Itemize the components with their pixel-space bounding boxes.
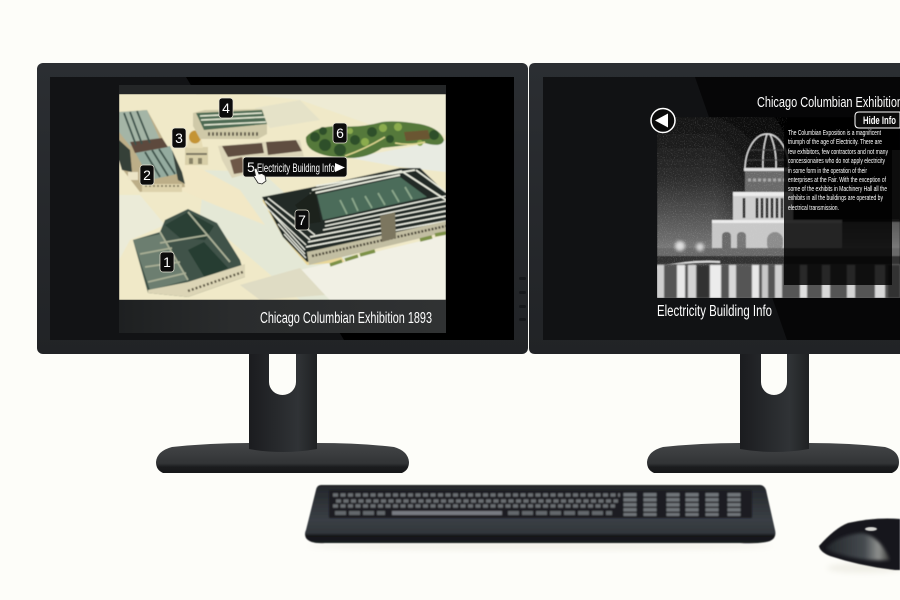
marker 4 — [219, 98, 233, 118]
slide caption: Electricity Building Info — [657, 303, 772, 320]
key area — [329, 490, 752, 518]
right monitor — [529, 63, 900, 354]
bezel — [529, 63, 900, 354]
bezel — [37, 63, 528, 354]
marker 6: 6 — [336, 125, 344, 141]
shoreline — [657, 248, 900, 258]
dome — [744, 134, 790, 192]
building 1 — [133, 209, 245, 297]
marker 5 tooltip: Electricity Building Info: Electricity Building Info — [257, 161, 335, 175]
map top bar — [119, 85, 446, 94]
marker 5 tooltip: Electricity Building Info: 5 — [247, 159, 255, 175]
illustrated fairground map — [119, 94, 446, 300]
screen reflection — [50, 77, 344, 340]
icon: back arrow button — [651, 108, 675, 132]
colonnade — [733, 192, 793, 222]
info text panel — [784, 123, 892, 285]
building 4 — [193, 109, 267, 139]
right monitor stand — [647, 354, 899, 473]
marker 2 — [140, 165, 154, 185]
screen — [543, 77, 900, 340]
monitor buttons — [519, 277, 526, 321]
map caption: Chicago Columbian Exhibition 1893 — [260, 310, 432, 327]
water reflections — [657, 264, 900, 298]
marker 3: 3 — [175, 130, 183, 146]
marker 7: 7 — [298, 212, 306, 228]
marker 1: 1 — [163, 254, 171, 270]
building 5 — [218, 140, 304, 178]
building 6 island — [306, 121, 444, 158]
building 2 — [119, 110, 185, 192]
keyboard — [305, 485, 775, 550]
building 7 machinery hall — [262, 168, 446, 265]
screen — [50, 77, 514, 340]
left monitor — [37, 63, 528, 354]
building 3 — [185, 130, 208, 165]
mouse — [819, 518, 900, 573]
map caption bar — [119, 300, 446, 333]
marker 5 tooltip: Electricity Building Info — [243, 157, 347, 177]
night photo of the electricity building — [657, 117, 900, 298]
marker 4: 4 — [222, 100, 230, 116]
marker 6 — [333, 123, 347, 143]
left monitor stand — [156, 354, 409, 473]
marker 3 — [172, 128, 186, 148]
marker 2: 2 — [143, 167, 151, 183]
marker 7 — [295, 210, 309, 230]
marker 1 — [160, 252, 174, 272]
info paragraph — [788, 128, 888, 212]
icon: hand cursor — [254, 168, 266, 184]
panel: electricity building slide — [651, 94, 900, 320]
panel: exhibition map slide — [119, 85, 446, 333]
lower facade — [711, 219, 843, 249]
hide info button — [855, 112, 900, 128]
screen reflection — [543, 77, 787, 340]
info paragraph: electrical transmission. — [788, 203, 839, 212]
